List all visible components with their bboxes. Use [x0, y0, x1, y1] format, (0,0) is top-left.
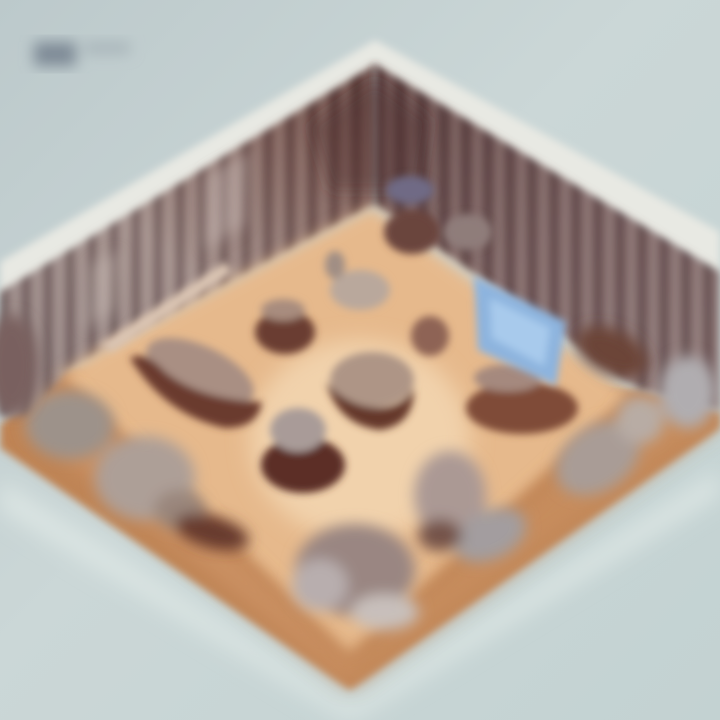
furniture: centre front table	[261, 408, 345, 493]
left wall	[0, 64, 375, 415]
furniture: left grey sofa	[26, 391, 253, 557]
icon: blue screen	[474, 276, 566, 386]
right wall	[375, 64, 720, 410]
furniture: centre sofa	[326, 352, 414, 430]
furniture: sofa left	[130, 324, 264, 428]
furniture: front right sofa	[414, 451, 535, 573]
room base: orange edge	[0, 370, 720, 690]
furniture: back cabinet	[384, 176, 492, 254]
light band under room	[0, 470, 720, 720]
furniture: screen desk	[466, 364, 578, 434]
furniture: chair top	[325, 251, 390, 310]
furniture: side table	[411, 316, 449, 356]
furniture: back right chair	[568, 316, 656, 388]
left corner dark	[0, 315, 38, 415]
furniture: front sofa	[292, 524, 419, 630]
floor shading	[25, 340, 720, 685]
furniture: small table top	[255, 299, 315, 354]
left wall ledge highlight	[100, 262, 232, 352]
floor	[60, 207, 630, 655]
furniture: right grey seats	[542, 356, 716, 511]
wall shading	[85, 80, 430, 330]
room white outer rim	[0, 40, 720, 300]
heading smudge	[34, 42, 130, 66]
